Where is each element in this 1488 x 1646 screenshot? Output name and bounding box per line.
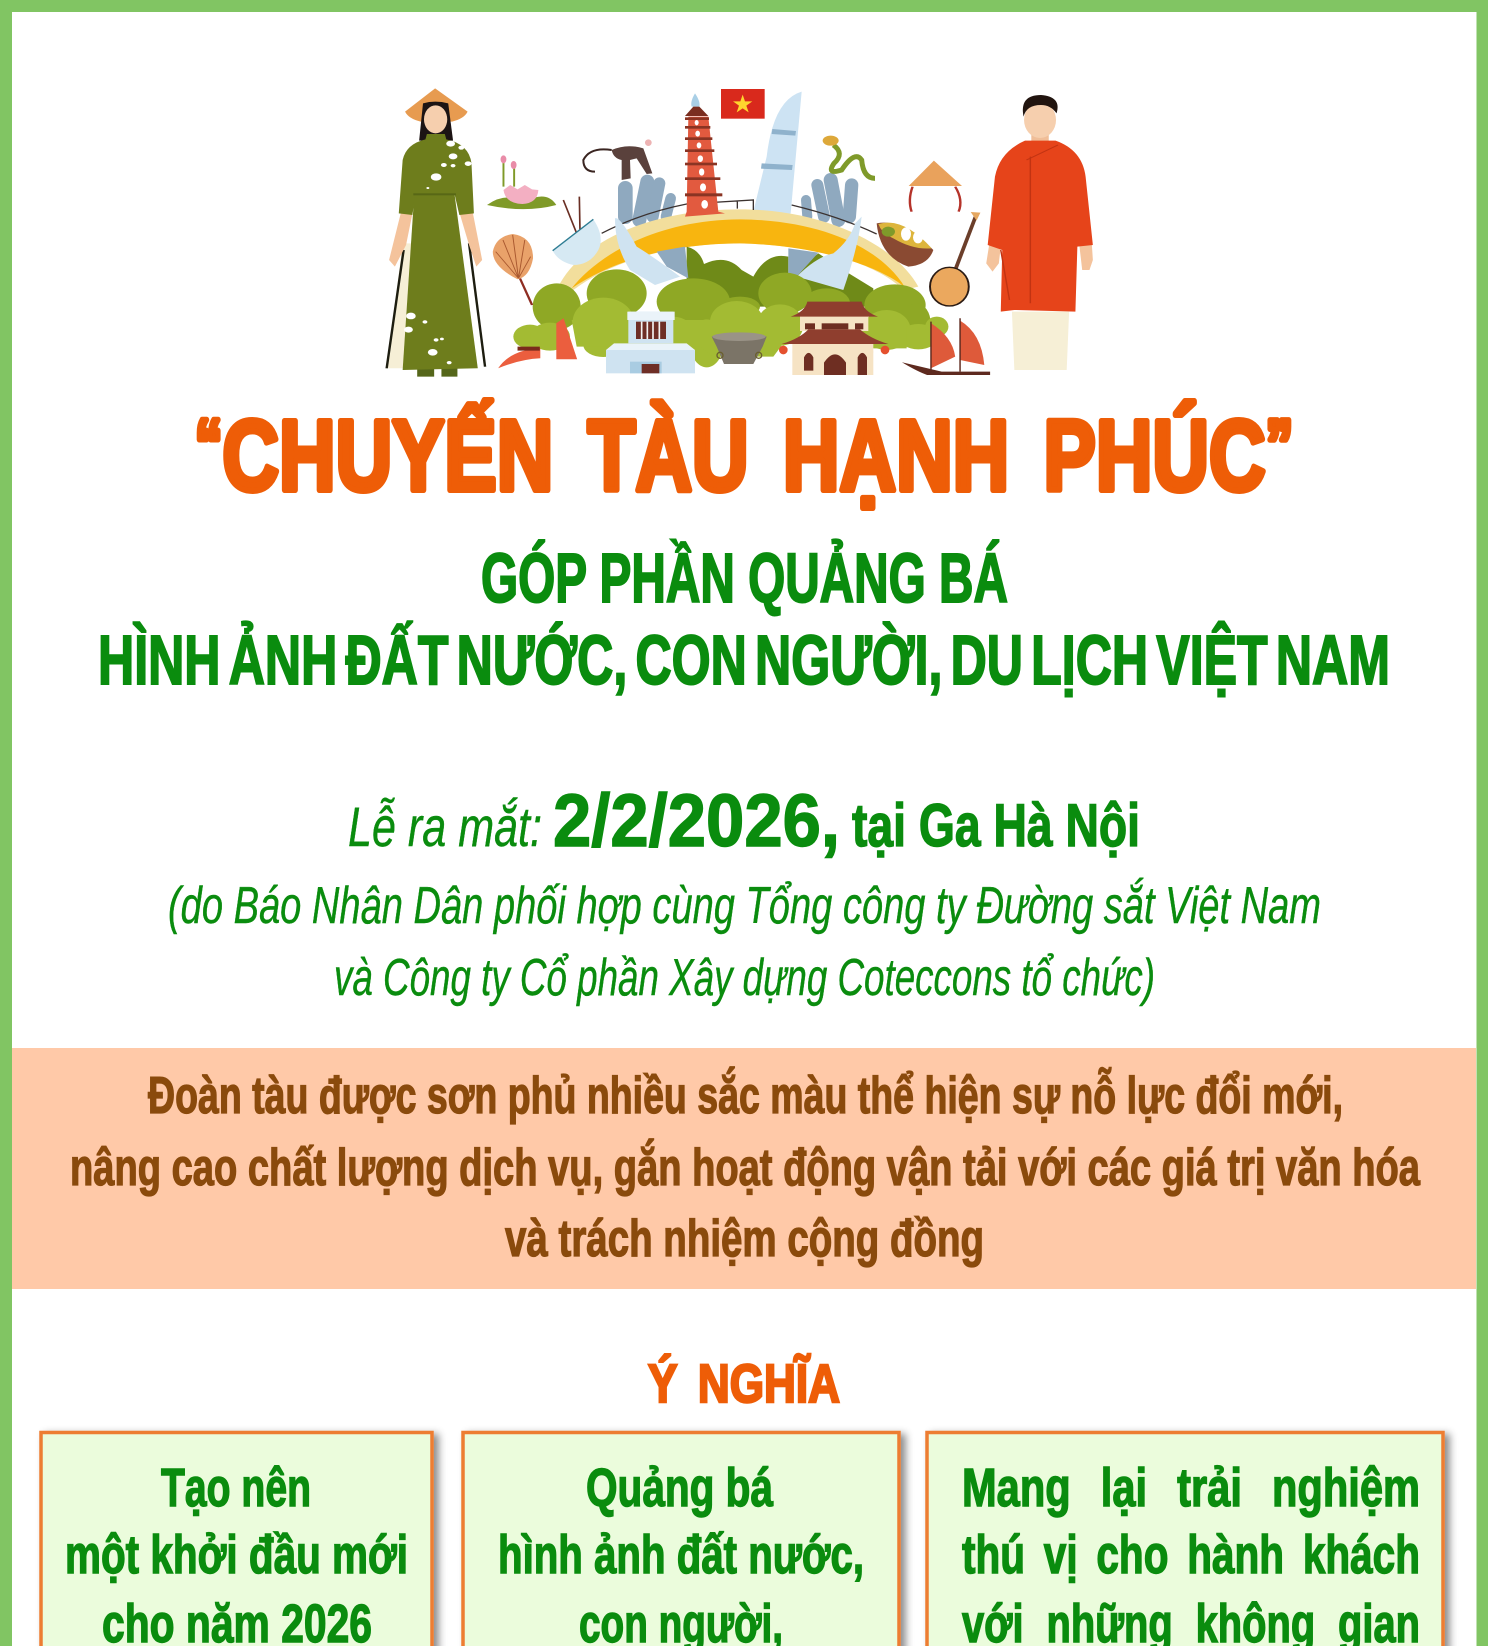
card: new beginning: [41, 1432, 432, 1646]
card: new beginning: một khởi đầu mới: [65, 1525, 408, 1585]
launch date line: tại Ga Hà Nội: [852, 792, 1140, 859]
icon: dark green hills: [687, 247, 873, 307]
icon: pagoda: [685, 93, 725, 217]
launch date line: Lễ ra mắt:: [348, 795, 542, 858]
centre landmarks: [513, 89, 938, 375]
organisers note: [168, 877, 1321, 1007]
card: new beginning: Tạo nên: [161, 1458, 311, 1518]
title: ”: [1266, 405, 1293, 483]
icon: bushes: [513, 269, 938, 367]
icon: noodle basket: [877, 223, 933, 267]
panel: description band: và trách nhiệm cộng đồng: [505, 1210, 984, 1268]
subtitle: GÓP PHẦN QUẢNG BÁ: [481, 539, 1008, 617]
icon: red crane and boat prow: [498, 318, 577, 368]
icon: pale hands: [615, 217, 862, 290]
subtitle: [98, 539, 1390, 699]
icon: bush by the boat: [925, 317, 948, 337]
side icons over the scene: [487, 155, 990, 375]
icon: bowl and chopsticks: [553, 197, 601, 265]
icon: dragon: [823, 136, 875, 178]
figures and side icons: [387, 88, 1093, 377]
card: promoting image: [463, 1432, 899, 1646]
section heading: meaning: Ý NGHĨA: [648, 1354, 840, 1414]
card: promoting image: Quảng bá: [586, 1458, 774, 1518]
icon: stone hands fingers: [625, 180, 852, 220]
icon: conical hat with strap: [909, 161, 962, 212]
card: passenger experience: [927, 1432, 1443, 1646]
icon: sailing junk: [902, 318, 990, 375]
icon: blue-grey wrists: [657, 247, 818, 278]
launch date line: 2/2/2026,: [553, 779, 840, 862]
icon: palm fan: [493, 234, 533, 305]
panel: description band: [12, 1048, 1476, 1289]
icon: monkey: [583, 139, 652, 180]
icon: Vietnam flag: [721, 89, 765, 119]
icon: arch bridge: [558, 200, 918, 290]
icon: temple: [779, 302, 889, 375]
icon: lotus: [487, 155, 556, 209]
launch date line: [348, 779, 1140, 862]
icon: glass tower: [753, 92, 802, 215]
icon: moon lute: [930, 212, 980, 306]
illustration: Vietnam culture collage: [387, 88, 1093, 377]
icon: bronze drum: [712, 332, 767, 364]
title: “: [195, 405, 222, 483]
figure: man in red ao dai: [986, 95, 1093, 370]
organisers note: và Công ty Cổ phần Xây dựng Coteccons tổ chức): [334, 949, 1155, 1007]
icon: mausoleum: [606, 312, 695, 373]
figure: woman in ao dai: [387, 88, 485, 377]
card: promoting image: hình ảnh đất nước,: [498, 1525, 864, 1585]
